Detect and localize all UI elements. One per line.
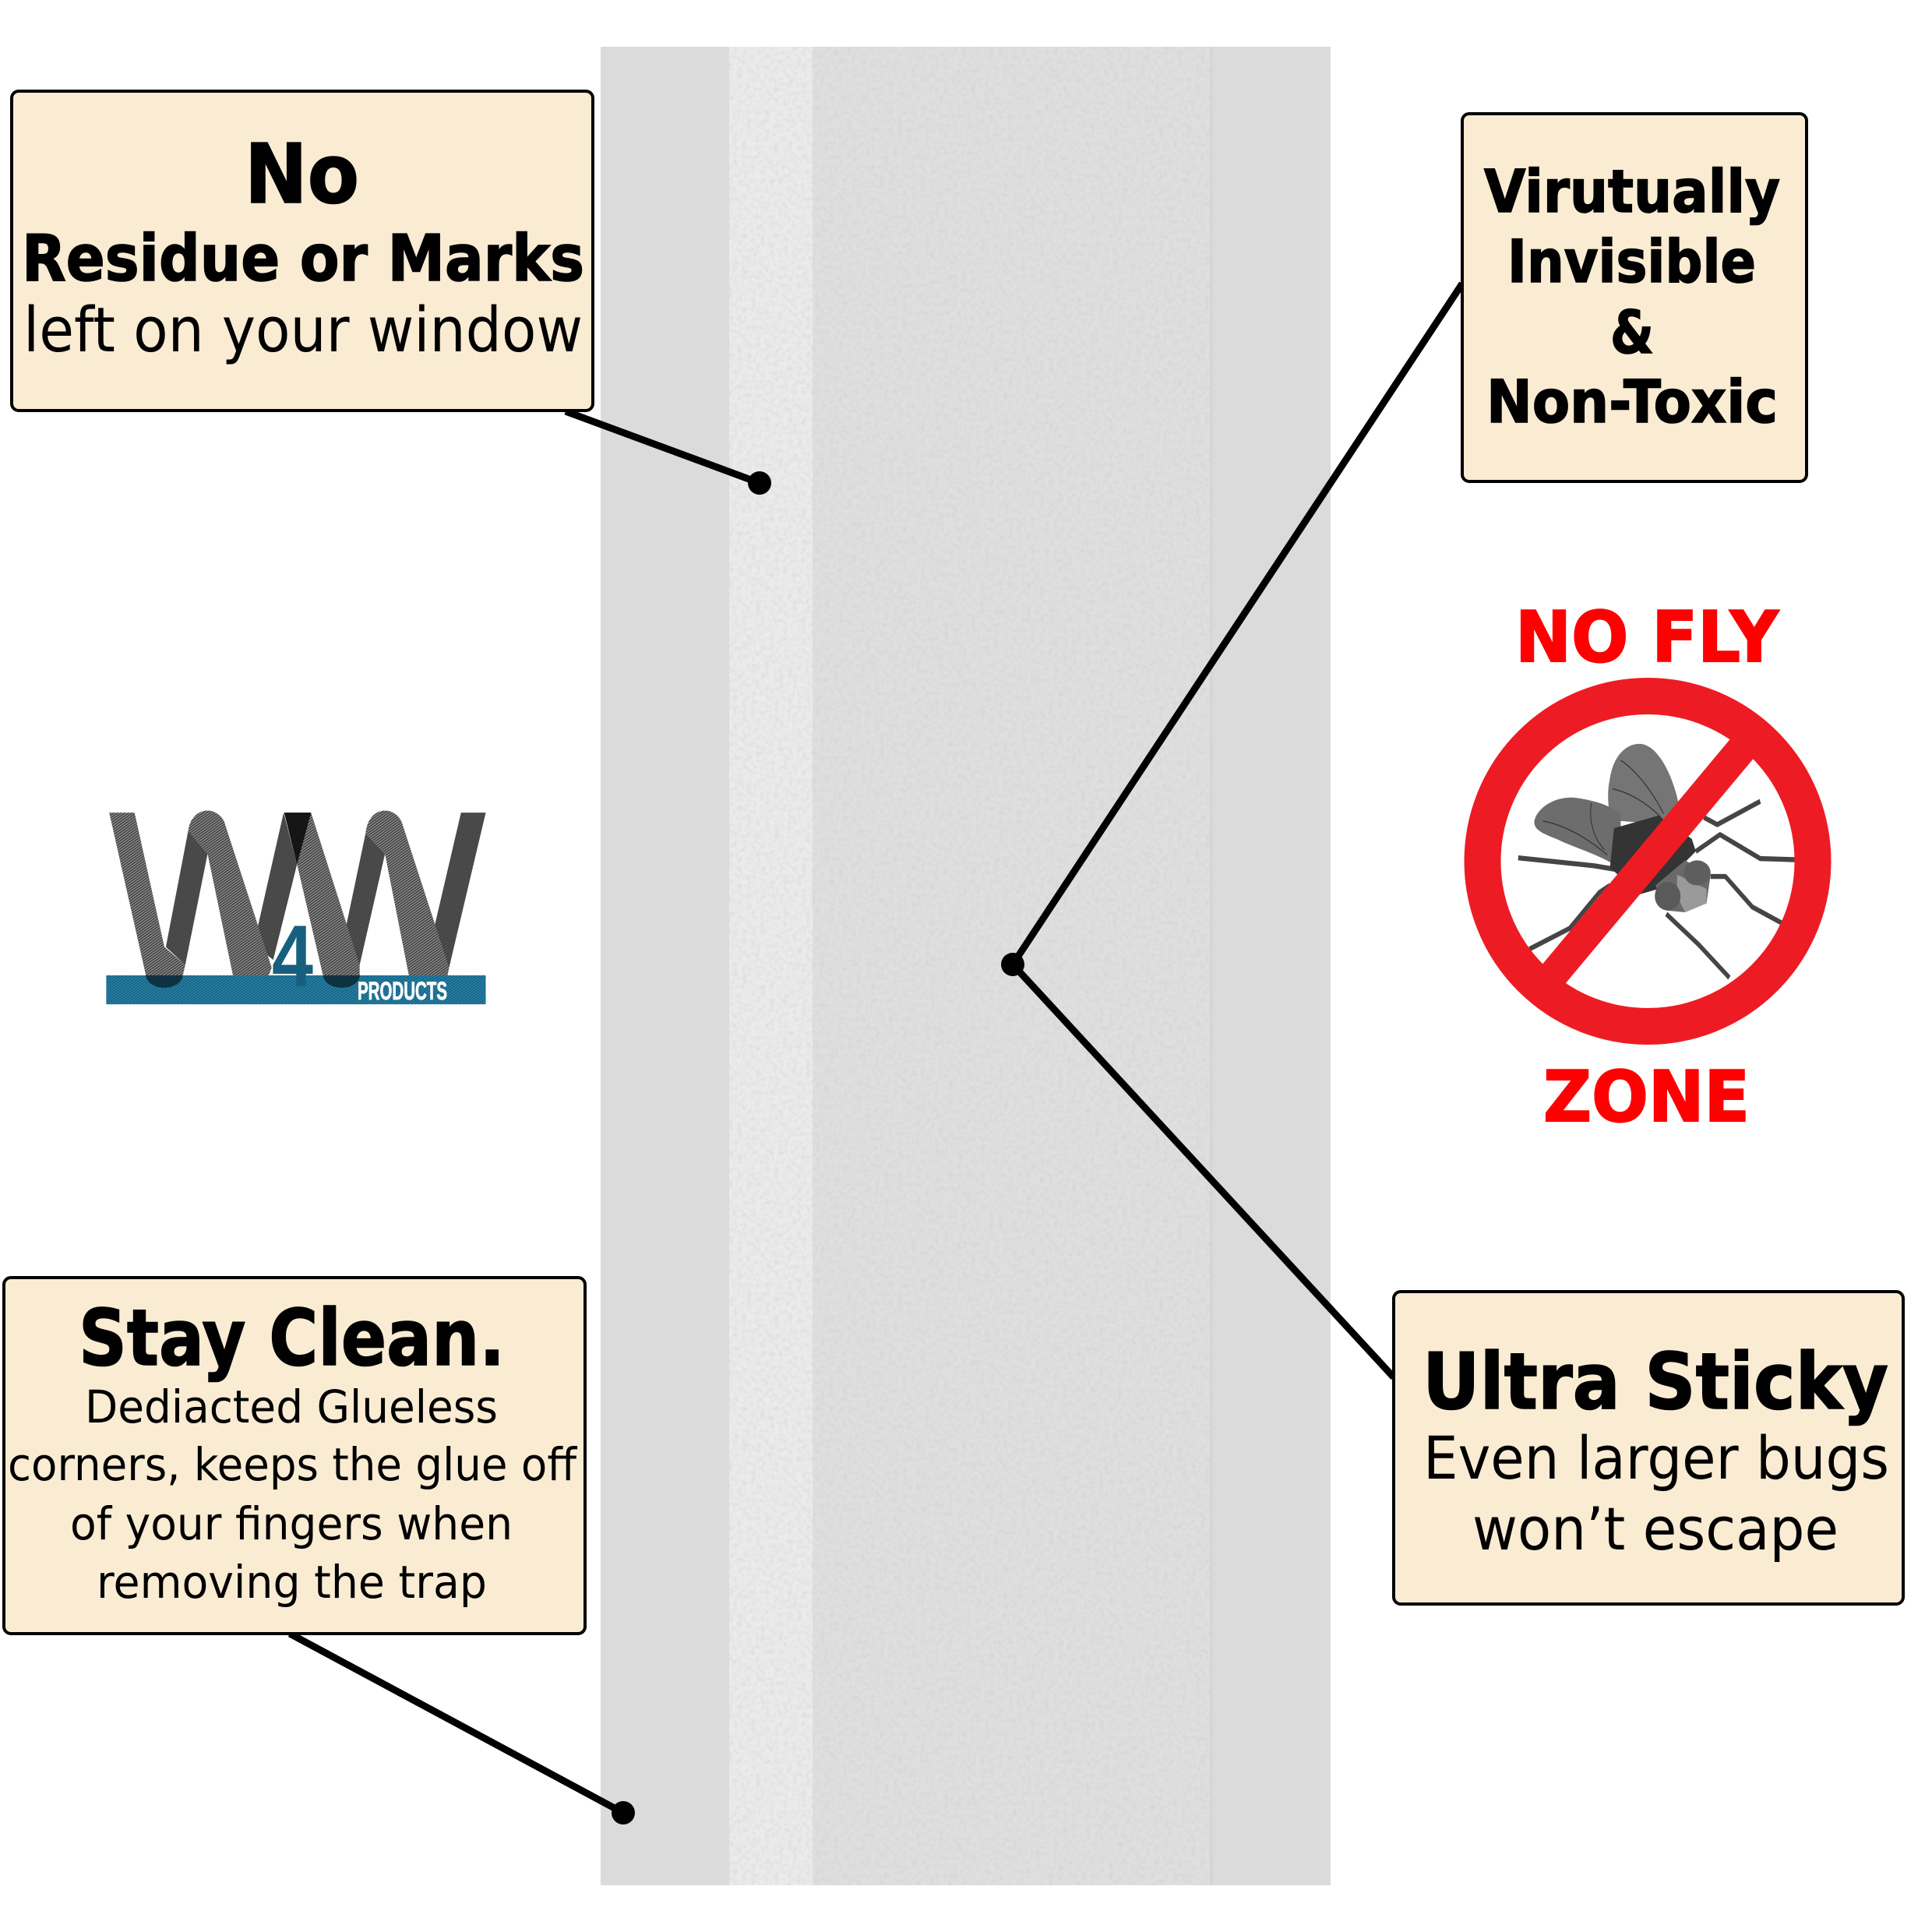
- connector: stay clean: [290, 1634, 635, 1824]
- heading: zone: ZONE: [1543, 1056, 1750, 1138]
- callout: stay clean: of your fingers when: [70, 1497, 513, 1550]
- icon: no fly sign: [1482, 696, 1813, 1027]
- prohibition ring: [1482, 696, 1813, 1027]
- callout: no residue or marks: [12, 91, 593, 411]
- adhesive texture: [729, 47, 1211, 1885]
- callout: stay clean: Dediacted Glueless: [85, 1380, 498, 1433]
- logo dark strands: [166, 813, 486, 968]
- callout: virtually invisible and non-toxic: [1462, 114, 1807, 481]
- callout: virtually invisible and non-toxic: Virutually: [1484, 157, 1780, 226]
- logo light strands: [109, 810, 449, 975]
- callout: ultra sticky: Even larger bugs: [1423, 1423, 1889, 1493]
- connector: no residue: [566, 411, 771, 495]
- callout: virtually invisible and non-toxic: Non-Toxic: [1486, 367, 1778, 436]
- callout: stay clean: corners, keeps the glue off: [8, 1438, 578, 1491]
- heading: no fly: NO FLY: [1515, 597, 1780, 679]
- logo: W4W Products: PRODUCTS: [358, 977, 447, 1005]
- callout: stay clean: removing the trap: [97, 1556, 487, 1609]
- prohibition slash: [1524, 717, 1772, 1007]
- callout: virtually invisible and non-toxic: &: [1610, 298, 1654, 367]
- panel: fly trap sheet: [601, 47, 1331, 1885]
- logo: W4W Products: 4: [272, 908, 313, 1005]
- logo base bar: [106, 975, 486, 1004]
- callout: ultra sticky: [1394, 1292, 1903, 1604]
- connector: virtually invisible and ultra sticky: [1001, 284, 1462, 1377]
- callout: no residue or marks: Residue or Marks: [22, 222, 584, 296]
- logo strand shadows: [146, 975, 360, 988]
- callout: ultra sticky: Ultra Sticky: [1423, 1336, 1888, 1427]
- callout: no residue or marks: No: [245, 127, 359, 222]
- callout: stay clean: [4, 1278, 585, 1634]
- callout: virtually invisible and non-toxic: Invisible: [1507, 227, 1756, 296]
- callout: no residue or marks: left on your window: [23, 294, 583, 366]
- sticky edge shade: [1210, 47, 1213, 1885]
- callout: ultra sticky: won’t escape: [1472, 1494, 1839, 1564]
- sticky adhesive area: [813, 47, 1211, 1885]
- callout: stay clean: Stay Clean.: [79, 1292, 505, 1384]
- glueless corner strip: [729, 47, 813, 1885]
- logo dark peak: [284, 813, 311, 864]
- logo: W4W Products: [106, 810, 486, 1005]
- fly illustration: [1518, 744, 1795, 978]
